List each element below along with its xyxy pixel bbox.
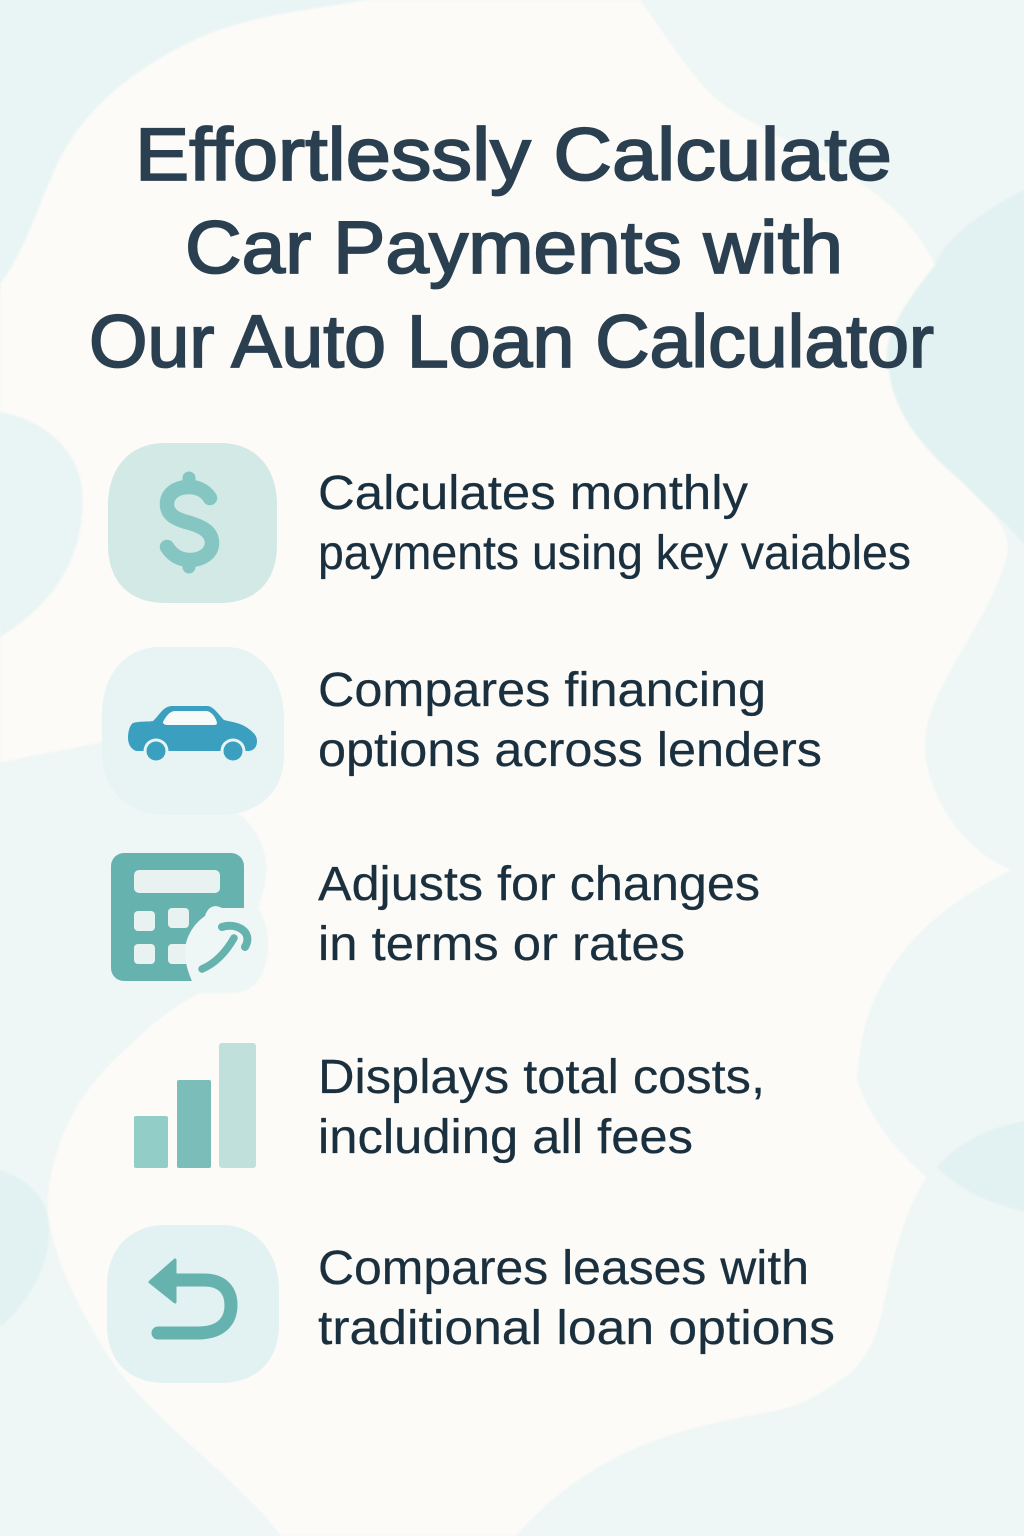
text: financing options [318,664,822,777]
icon: calculator with adjust badge [111,853,248,984]
row 2: financing options [102,647,822,815]
text: total costs [318,1051,765,1164]
icon: return arrow tile [107,1225,279,1383]
text: terms or rates [318,858,760,971]
text: terms or rates: Adjusts for changes [318,858,760,911]
title [89,113,934,383]
text: total costs: including all fees [318,1111,693,1164]
text: financing options: Compares financing [318,664,766,717]
text: financing options: options across lenders [318,724,822,777]
icon: dollar sign tile [108,443,277,603]
text: monthly payments: Calculates monthly [318,467,748,520]
row 4: total costs [134,1043,765,1168]
icon: bar chart [134,1043,256,1168]
text: total costs: Displays total costs, [318,1051,765,1104]
title: Car Payments with [185,206,843,289]
title: Our Auto Loan Calculator [89,300,934,383]
text: terms or rates: in terms or rates [318,918,685,971]
text: leases vs loans [318,1242,835,1355]
title: Effortlessly Calculate [135,113,892,196]
text: leases vs loans: Compares leases with [318,1242,809,1295]
text: monthly payments: payments using key vaiables [318,527,911,580]
text: monthly payments [318,467,911,580]
text: leases vs loans: traditional loan options [318,1302,835,1355]
row 5: leases vs loans [107,1225,835,1383]
row 1: monthly payments [108,443,911,603]
row 3: terms or rates [111,853,760,984]
icon: car tile [102,647,284,815]
